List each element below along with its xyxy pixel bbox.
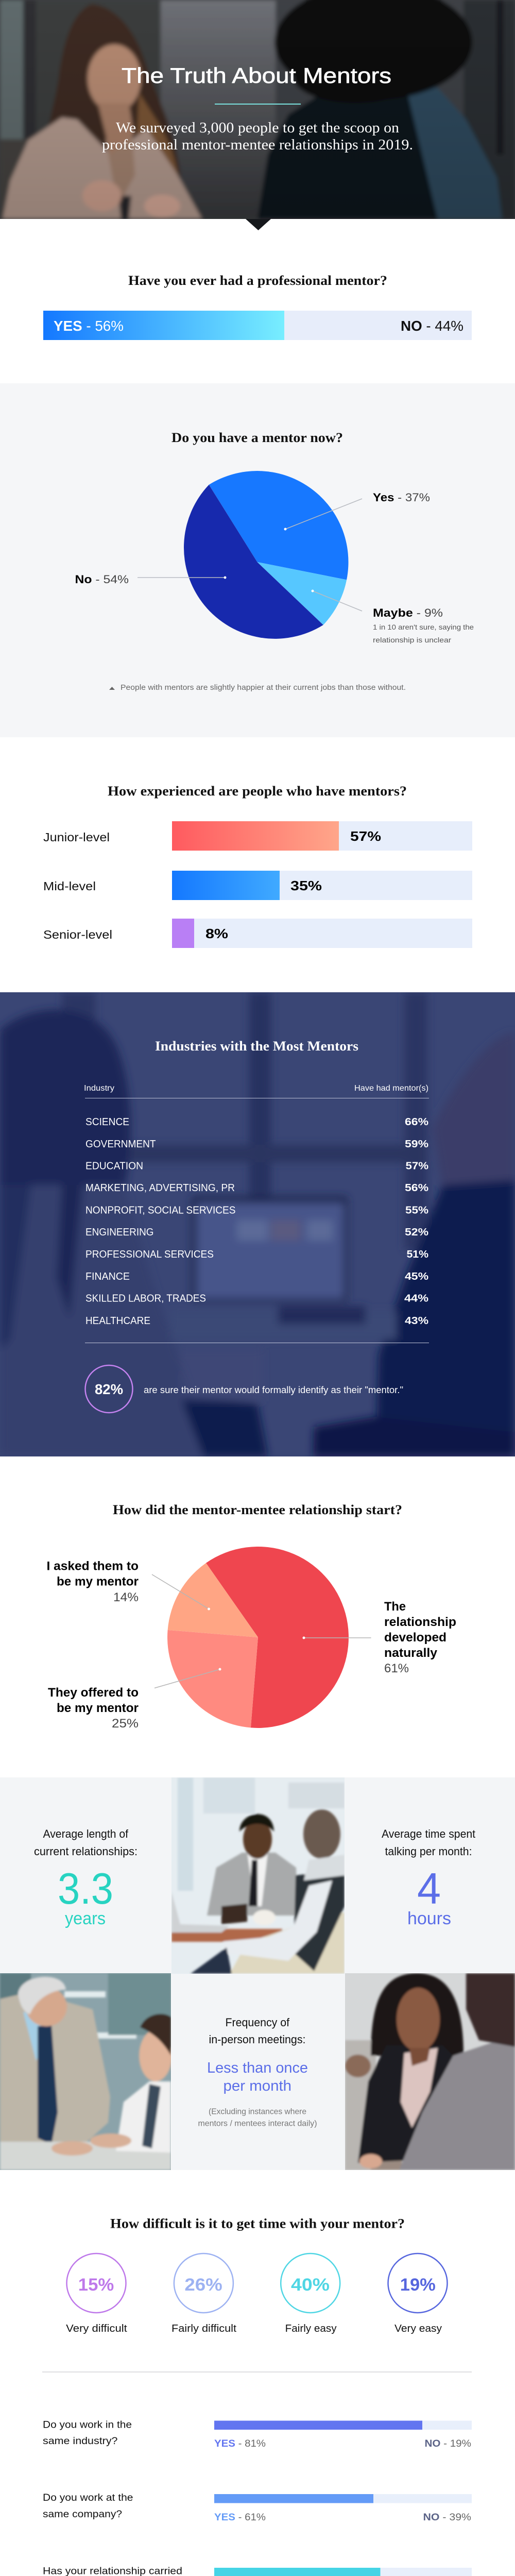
row: same company: Do you work at the xyxy=(43,2493,133,2503)
callout: yes xyxy=(284,491,430,531)
callout: asked them xyxy=(46,1559,210,1611)
stat: average length: years xyxy=(65,1909,106,1928)
panel: experience levels xyxy=(43,784,472,948)
stacked bar: yes 56 no 44: NO - 44% xyxy=(401,318,464,334)
table rows: MARKETING, ADVERTISING, PR xyxy=(85,1182,235,1194)
hero pointer arrow xyxy=(246,219,271,230)
photo: smiling woman with colleague xyxy=(345,1973,515,2170)
panel: relationship stats grid xyxy=(0,1777,515,2170)
bar: mid-level: Mid-level xyxy=(43,879,96,893)
stat: average length xyxy=(34,1827,138,1928)
stacked bar: yes 56 no 44: YES - 56% xyxy=(54,318,124,334)
table rows: 43% xyxy=(405,1315,428,1327)
subtitle xyxy=(102,120,413,153)
table rows: 56% xyxy=(405,1182,428,1194)
callout: developed naturally: The xyxy=(384,1600,406,1614)
table rows: GOVERNMENT xyxy=(85,1139,156,1150)
subtitle: We surveyed 3,000 people to get the scoop on xyxy=(116,120,399,136)
stat: in-person frequency: mentors / mentees interact daily) xyxy=(198,2120,317,2128)
stat: average length: Average length of xyxy=(43,1827,129,1840)
stat circle: very difficult xyxy=(66,2253,127,2334)
stat: in-person frequency: per month xyxy=(224,2078,291,2094)
panel: do you have a mentor now xyxy=(0,383,515,737)
heading: How did the mentor-mentee relationship start? xyxy=(113,1502,402,1517)
bar: junior-level xyxy=(43,821,472,851)
heading: How difficult is it to get time with your mentor? xyxy=(110,2216,405,2231)
callout: no xyxy=(75,573,227,586)
table rows: 55% xyxy=(405,1205,428,1216)
bar: senior-level xyxy=(43,919,472,948)
pie chart xyxy=(184,471,348,639)
panel: hero header xyxy=(0,0,515,219)
table rows: 66% xyxy=(405,1116,428,1128)
bar: mid-level: 35% xyxy=(290,878,322,893)
row: same industry: YES - 81% xyxy=(214,2438,266,2449)
row: same industry: NO - 19% xyxy=(424,2438,471,2449)
background photo with navy overlay xyxy=(0,992,515,1456)
callout: they offered: be my mentor xyxy=(57,1701,139,1715)
note: People with mentors are slightly happier at their current jobs than those without. xyxy=(121,684,406,692)
table rows: 51% xyxy=(407,1249,428,1260)
stat circle: very easy: Very easy xyxy=(394,2323,442,2334)
stat: in-person frequency: in-person meetings: xyxy=(209,2033,306,2046)
callout: developed naturally: 61% xyxy=(384,1662,409,1675)
callout: they offered xyxy=(48,1668,221,1731)
table rows: 52% xyxy=(405,1227,428,1238)
stat circle: fairly difficult xyxy=(171,2253,236,2334)
callout: developed naturally xyxy=(303,1600,456,1675)
heading: Do you have a mentor now? xyxy=(171,430,343,445)
stat: average time talking: hours xyxy=(407,1909,451,1928)
heading: Have you ever had a professional mentor? xyxy=(128,273,387,288)
table rows: FINANCE xyxy=(85,1271,130,1282)
pie chart xyxy=(167,1547,349,1728)
callout: asked them: 14% xyxy=(113,1590,139,1604)
stat: in-person frequency xyxy=(198,2016,317,2128)
table rows: SCIENCE xyxy=(85,1116,129,1128)
callout: developed naturally: relationship xyxy=(384,1615,456,1629)
hero photo: mentor and mentee talking xyxy=(0,0,515,219)
callout: no: No - 54% xyxy=(75,573,129,586)
stat: average time talking: Average time spent xyxy=(382,1827,475,1840)
heading: Industries with the Most Mentors xyxy=(155,1039,358,1054)
heading: How experienced are people who have mentors? xyxy=(108,784,407,799)
callout: 82 percent xyxy=(85,1365,403,1413)
table rows: 59% xyxy=(405,1139,428,1150)
stat circle: very difficult: 15% xyxy=(78,2275,114,2295)
stat circle: fairly difficult: 26% xyxy=(184,2275,222,2295)
table rows: 57% xyxy=(406,1160,428,1172)
photo: two businessmen at cafe table xyxy=(171,1777,345,1974)
stat circle: fairly easy: 40% xyxy=(291,2275,330,2295)
stat: average length: 3.3 xyxy=(58,1865,113,1913)
stat circle: fairly difficult: Fairly difficult xyxy=(171,2323,236,2334)
callout: they offered: They offered to xyxy=(48,1686,139,1700)
photo: senior man with young colleague xyxy=(0,1973,172,2170)
table rows: ENGINEERING xyxy=(85,1227,153,1238)
table header: Have had mentor(s) xyxy=(354,1084,428,1093)
row: same company: same company? xyxy=(43,2509,122,2520)
stat circle: very easy xyxy=(388,2253,447,2334)
bar: mid-level xyxy=(43,871,472,900)
callout: developed naturally: naturally xyxy=(384,1646,438,1660)
callout: developed naturally: developed xyxy=(384,1631,447,1645)
subtitle: professional mentor-mentee relationships in 2019. xyxy=(102,137,413,153)
table rows: EDUCATION xyxy=(85,1160,143,1172)
callout: asked them: I asked them to xyxy=(46,1559,139,1573)
table header: Industry xyxy=(84,1084,114,1093)
stat: average time talking: talking per month: xyxy=(385,1845,472,1858)
bar: junior-level: 57% xyxy=(350,828,381,844)
callout: maybe: 1 in 10 aren't sure, saying the xyxy=(373,623,474,631)
stat: in-person frequency: Less than once xyxy=(207,2060,308,2076)
stat: in-person frequency: (Excluding instances where xyxy=(209,2107,306,2116)
stat circle: very easy: 19% xyxy=(400,2275,436,2295)
callout: maybe: Maybe - 9% xyxy=(373,606,443,619)
stat: in-person frequency: Frequency of xyxy=(226,2016,290,2029)
title: The Truth About Mentors xyxy=(122,63,391,88)
title underline xyxy=(215,104,301,105)
stat circle: fairly easy: Fairly easy xyxy=(285,2323,337,2334)
row: same industry: same industry? xyxy=(43,2436,117,2447)
stat circle: fairly easy xyxy=(281,2253,340,2334)
panel: ever had a mentor xyxy=(43,273,472,340)
callout: asked them: be my mentor xyxy=(57,1574,139,1589)
bar: senior-level: 8% xyxy=(205,926,228,941)
table rows: SKILLED LABOR, TRADES xyxy=(85,1293,206,1304)
stat: average time talking: 4 xyxy=(417,1865,441,1913)
row: same industry: Do you work in the xyxy=(43,2419,132,2431)
panel: how difficult xyxy=(42,2216,472,2576)
table rows xyxy=(85,1116,428,1327)
callout: yes: Yes - 37% xyxy=(373,491,430,504)
row: same industry xyxy=(43,2419,472,2449)
table rows: 44% xyxy=(404,1293,428,1304)
table rows: PROFESSIONAL SERVICES xyxy=(85,1249,214,1260)
panel: industries table xyxy=(0,992,515,1456)
table header xyxy=(84,1084,429,1098)
callout: they offered: 25% xyxy=(112,1717,139,1731)
panel: how the relationship started xyxy=(46,1502,456,1731)
table rows: HEALTHCARE xyxy=(85,1315,150,1327)
stat: average time talking xyxy=(382,1827,475,1928)
bar: junior-level: Junior-level xyxy=(43,831,110,844)
row: same company: YES - 61% xyxy=(214,2512,266,2523)
row: same company: NO - 39% xyxy=(423,2512,471,2523)
stacked bar: yes 56 no 44 xyxy=(43,311,472,340)
row: multiple jobs xyxy=(43,2566,472,2576)
table rows: 45% xyxy=(405,1271,428,1282)
table rows: NONPROFIT, SOCIAL SERVICES xyxy=(85,1205,236,1216)
callout: maybe: relationship is unclear xyxy=(373,636,451,644)
stat circle: very difficult: Very difficult xyxy=(66,2323,127,2334)
callout: 82 percent: 82% xyxy=(95,1381,123,1397)
callout: 82 percent: are sure their mentor would formally identify as their "mentor." xyxy=(144,1385,403,1395)
bar: senior-level: Senior-level xyxy=(43,928,112,941)
row: same company xyxy=(43,2493,472,2523)
stat: average length: current relationships: xyxy=(34,1845,138,1858)
callout: maybe xyxy=(311,589,474,644)
